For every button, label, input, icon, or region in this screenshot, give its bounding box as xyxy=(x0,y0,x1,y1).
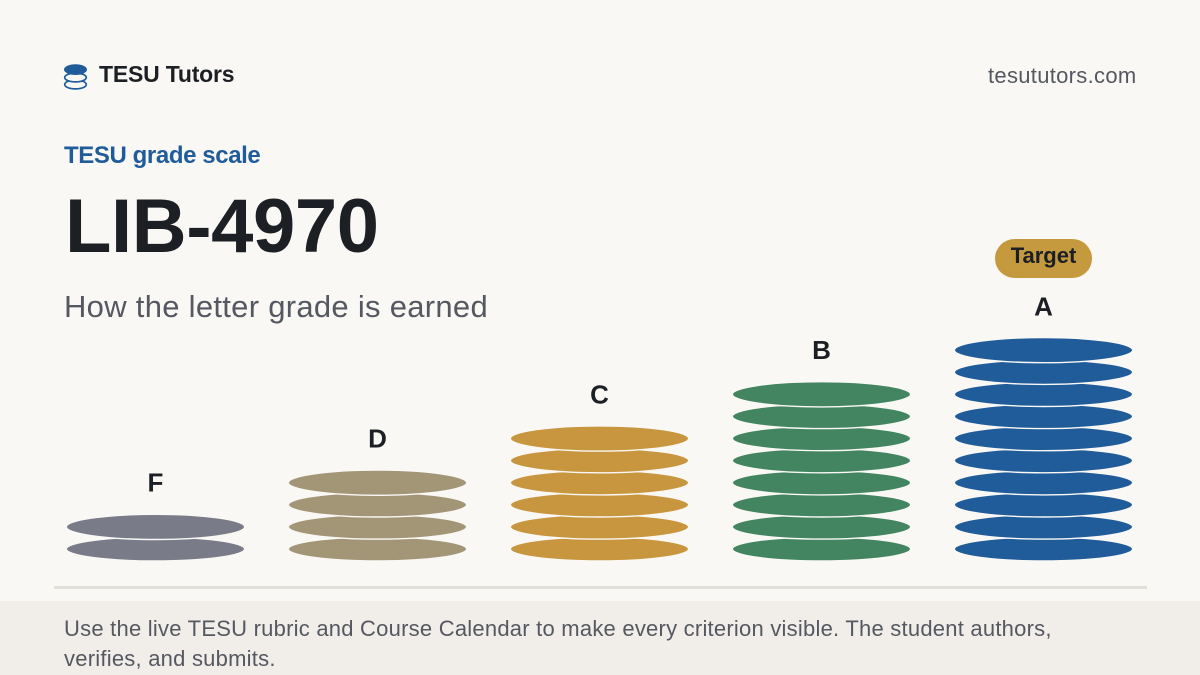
title: LIB-4970 xyxy=(65,184,379,269)
stack: grade D: D xyxy=(368,424,387,454)
footer note xyxy=(64,616,1052,671)
icon: logo disc stack xyxy=(64,64,88,90)
stack: grade D xyxy=(288,424,467,561)
stack: grade A xyxy=(954,292,1133,561)
stack: grade B: B xyxy=(812,335,831,365)
stack: grade C: C xyxy=(590,380,609,410)
stack: grade A: A xyxy=(1034,292,1053,322)
brand name: TESU Tutors xyxy=(99,61,234,87)
stack: grade C xyxy=(510,380,689,561)
footer note: verifies, and submits. xyxy=(64,646,276,671)
website url: tesututors.com xyxy=(988,63,1136,88)
stack: grade F: F xyxy=(148,468,163,498)
target badge xyxy=(995,239,1092,278)
subtitle: How the letter grade is earned xyxy=(64,289,488,324)
stack: grade F xyxy=(66,468,245,561)
target badge: Target xyxy=(1011,243,1076,268)
eyebrow heading: TESU grade scale xyxy=(64,142,260,169)
stack: grade B xyxy=(732,335,911,561)
footer note: Use the live TESU rubric and Course Calendar to make every criterion visible. The student authors, xyxy=(64,616,1052,641)
footer band xyxy=(0,601,1200,675)
